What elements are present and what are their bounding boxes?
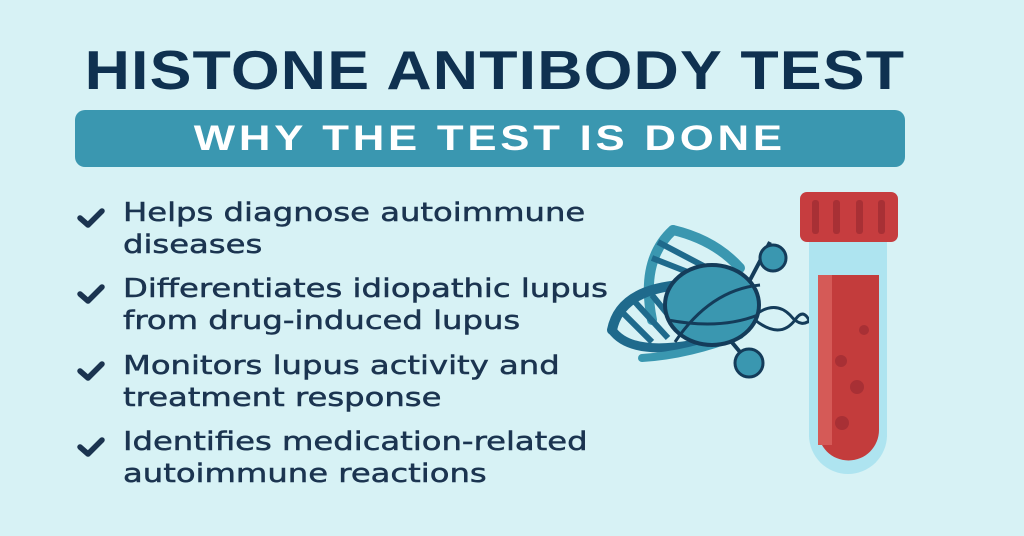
bullet 2: from drug-induced lupus	[123, 306, 520, 336]
bullet 2: Differentiates idiopathic lupus	[123, 274, 608, 304]
bullet 4	[77, 427, 588, 489]
bullet 3: treatment response	[123, 383, 441, 413]
icon: blood test tube	[800, 192, 898, 474]
bullet 3	[77, 351, 560, 413]
banner: why the test is done	[75, 110, 905, 167]
bullet 1	[77, 198, 585, 260]
banner: why the test is done: WHY THE TEST IS DONE	[194, 119, 786, 158]
bullet 4: Identifies medication-related	[123, 427, 588, 457]
bullet 1: Helps diagnose autoimmune	[123, 198, 585, 228]
bullet 1: diseases	[123, 230, 262, 260]
bullet 4: autoimmune reactions	[123, 459, 487, 489]
title: HISTONE ANTIBODY TEST	[85, 39, 905, 101]
bullet 2	[77, 274, 608, 336]
bullet 3: Monitors lupus activity and	[123, 351, 560, 381]
illustration: DNA histone and blood tube	[607, 192, 898, 474]
icon: DNA helix with histone	[612, 230, 812, 377]
